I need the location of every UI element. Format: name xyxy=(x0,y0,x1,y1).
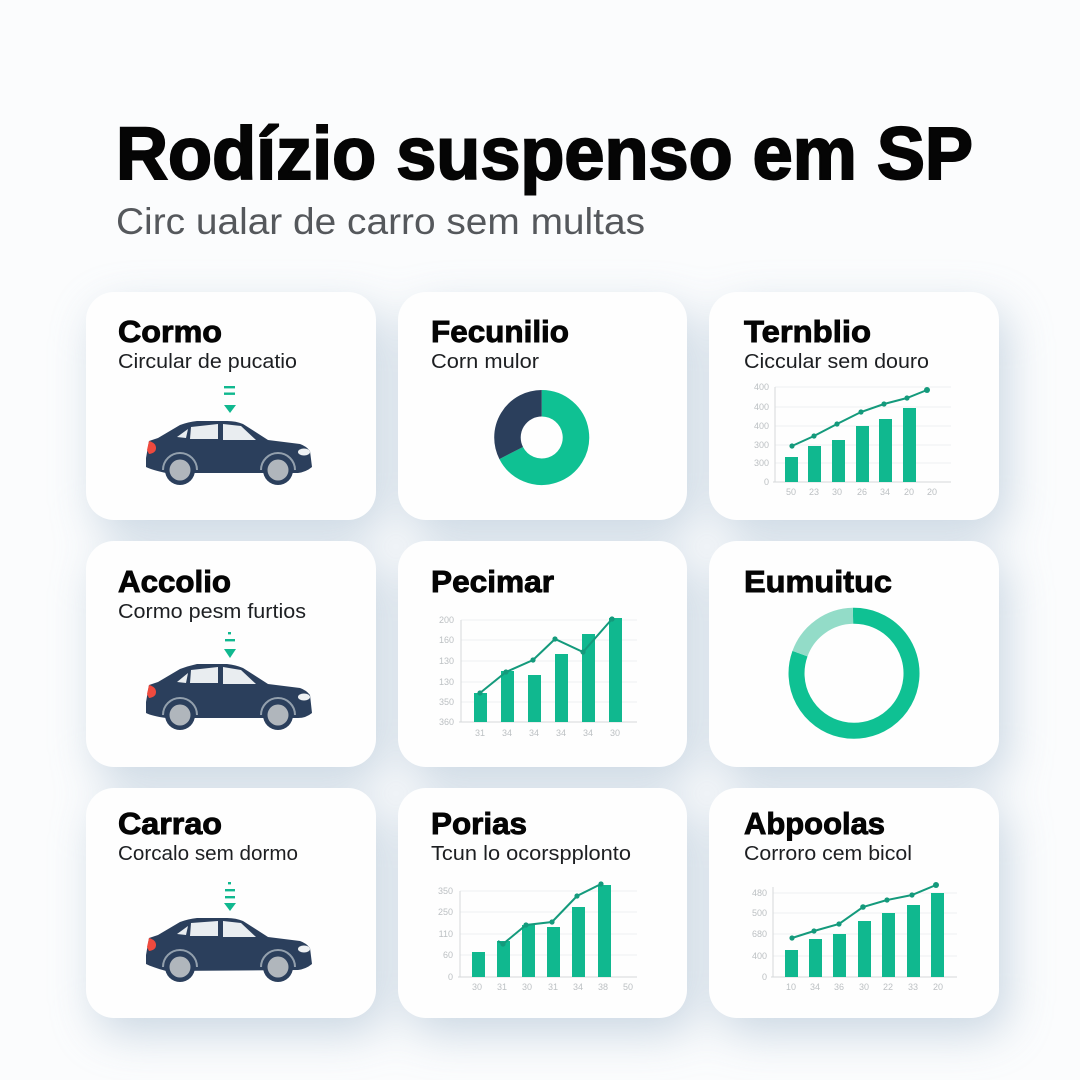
chart: bars and line: 20 xyxy=(933,982,943,992)
icon: car xyxy=(146,664,312,730)
chart: bars and line: 110 xyxy=(439,929,453,939)
heading: Fecunilio: Fecunilio xyxy=(431,314,569,349)
chart: bars and line xyxy=(752,882,957,992)
icon: arrow down xyxy=(224,882,236,911)
heading: Abpoolas: Abpoolas xyxy=(744,806,885,841)
chart: bars and line: 400 xyxy=(754,421,769,431)
text: Ciccular sem douro: Ciccular sem douro xyxy=(744,351,929,373)
title: Rodízio suspenso em SP xyxy=(116,112,973,195)
heading: Cormo: Cormo xyxy=(118,314,222,349)
chart: bars and line: 30 xyxy=(522,982,532,992)
chart: bars and line: 50 xyxy=(623,982,633,992)
chart: bars and line: 30 xyxy=(472,982,482,992)
chart: bars and line: 130 xyxy=(439,656,454,666)
chart: bars and line: 30 xyxy=(832,487,842,497)
text: Corroro cem bicol: Corroro cem bicol xyxy=(744,843,912,865)
panel: Fecunilio xyxy=(398,292,687,520)
text: Corcalo sem dormo: Corcalo sem dormo xyxy=(118,843,298,865)
chart: bars and line: 500 xyxy=(752,908,767,918)
icon: car xyxy=(146,918,312,982)
chart: bars and line: 23 xyxy=(809,487,819,497)
icon: car xyxy=(146,421,312,485)
panel: Abpoolas xyxy=(709,788,999,1018)
chart: bars and line: 250 xyxy=(438,907,453,917)
heading: Porias: Porias xyxy=(431,806,527,841)
donut chart xyxy=(507,403,576,472)
chart: bars and line: 400 xyxy=(754,402,769,412)
chart: bars and line: 360 xyxy=(439,717,454,727)
chart: bars and line: 33 xyxy=(908,982,918,992)
chart: bars and line: 34 xyxy=(529,728,539,738)
text: Cormo pesm furtios: Cormo pesm furtios xyxy=(118,601,306,623)
chart: bars and line: 350 xyxy=(438,886,453,896)
chart: bars and line: 20 xyxy=(927,487,937,497)
chart: bars and line: 30 xyxy=(610,728,620,738)
chart: bars and line: 34 xyxy=(502,728,512,738)
chart: bars and line xyxy=(438,881,637,992)
chart: bars and line: 0 xyxy=(762,972,767,982)
chart: bars and line: 34 xyxy=(810,982,820,992)
icon: arrow down xyxy=(224,632,236,658)
heading: Carrao: Carrao xyxy=(118,806,222,841)
chart: bars and line: 34 xyxy=(583,728,593,738)
icon: arrow down xyxy=(224,386,236,413)
panel: Accolio xyxy=(86,541,376,767)
chart: bars and line: 38 xyxy=(598,982,608,992)
chart: bars and line: 160 xyxy=(439,635,454,645)
panel: Pecimar xyxy=(398,541,687,767)
chart: bars and line: 0 xyxy=(764,477,769,487)
chart: bars and line: 130 xyxy=(439,677,454,687)
chart: bars and line: 400 xyxy=(752,951,767,961)
chart: bars and line: 34 xyxy=(880,487,890,497)
chart: bars and line: 31 xyxy=(548,982,558,992)
heading: Accolio: Accolio xyxy=(118,564,231,599)
subtitle: Circ ualar de carro sem multas xyxy=(116,201,645,242)
chart: bars and line: 10 xyxy=(786,982,796,992)
heading: Pecimar: Pecimar xyxy=(431,564,554,599)
chart: bars and line: 30 xyxy=(859,982,869,992)
text: Corn mulor: Corn mulor xyxy=(431,351,539,373)
chart: bars and line: 680 xyxy=(752,929,767,939)
chart: bars and line: 350 xyxy=(439,697,454,707)
chart: bars and line: 480 xyxy=(752,888,767,898)
chart: bars and line: 20 xyxy=(904,487,914,497)
chart: bars and line: 31 xyxy=(475,728,485,738)
panel: Eumuituc xyxy=(709,541,999,767)
chart: bars and line: 50 xyxy=(786,487,796,497)
chart: bars and line: 31 xyxy=(497,982,507,992)
chart: bars and line xyxy=(439,615,637,738)
ring chart xyxy=(797,616,912,731)
chart: bars and line: 400 xyxy=(754,382,769,392)
chart: bars and line: 34 xyxy=(573,982,583,992)
panel: Ternblio xyxy=(709,292,999,520)
chart: bars and line: 22 xyxy=(883,982,893,992)
chart: bars and line: 36 xyxy=(834,982,844,992)
chart: bars and line: 200 xyxy=(439,615,454,625)
panel: Cormo xyxy=(86,292,376,520)
text: Tcun lo ocorspplonto: Tcun lo ocorspplonto xyxy=(431,843,631,865)
chart: bars and line: 300 xyxy=(754,458,769,468)
heading: Eumuituc: Eumuituc xyxy=(744,564,892,599)
chart: bars and line: 34 xyxy=(556,728,566,738)
chart: bars and line: 60 xyxy=(443,950,453,960)
chart: bars and line: 0 xyxy=(448,972,453,982)
heading: Ternblio: Ternblio xyxy=(744,314,871,349)
panel: Porias xyxy=(398,788,687,1018)
text: Circular de pucatio: Circular de pucatio xyxy=(118,351,297,373)
chart: bars and line: 300 xyxy=(754,440,769,450)
chart: bars and line: 26 xyxy=(857,487,867,497)
panel: Carrao xyxy=(86,788,376,1018)
chart: bars and line xyxy=(754,382,951,497)
